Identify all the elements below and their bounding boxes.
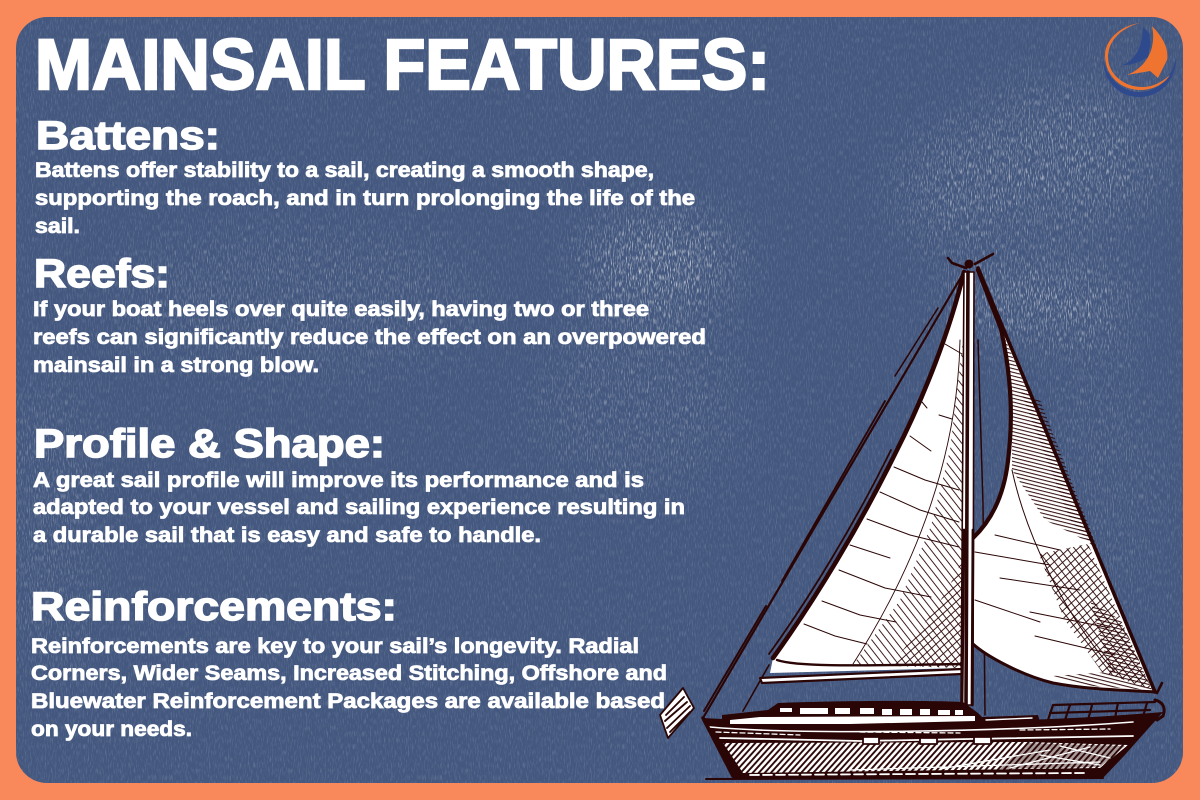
text block: Reefs description: mainsail in a strong blow.: [33, 354, 319, 377]
title: MAINSAIL FEATURES:: [35, 26, 770, 105]
mast: [948, 254, 993, 705]
main sail (left): [760, 272, 966, 683]
section: Reefs: [33, 252, 706, 377]
heading: Profile and Shape: Profile & Shape:: [34, 422, 385, 466]
text block: Reefs description: reefs can significantly reduce the effect on an overpowered: [33, 326, 706, 349]
text block: Profile and Shape description: adapted to your vessel and sailing experience resulting in: [33, 496, 685, 519]
head sail (right): [973, 268, 1155, 692]
stern railing: [1048, 683, 1164, 720]
text block: Reinforcements description: Bluewater Reinforcement Packages are available based: [31, 690, 665, 713]
text block: Reinforcements description: [31, 635, 667, 741]
text block: Profile and Shape description: [33, 469, 685, 547]
text block: Reinforcements description: on your needs.: [31, 718, 192, 741]
text block: Battens description: sail.: [35, 215, 80, 238]
heading: Reinforcements: Reinforcements:: [31, 585, 397, 629]
text block: Battens description: Battens offer stability to a sail, creating a smooth shape,: [35, 159, 654, 182]
deck and cabin: [722, 701, 1040, 724]
illustration: sailboat: [660, 254, 1164, 779]
text block: Battens description: [35, 159, 695, 238]
text block: Reefs description: If your boat heels over quite easily, having two or three: [33, 298, 649, 321]
boom: [760, 669, 962, 683]
text block: Profile and Shape description: A great sail profile will improve its performance and is: [33, 469, 644, 492]
heading: Battens: Battens:: [36, 114, 220, 158]
section: Battens: [35, 114, 695, 238]
logo: sailboat in circle: [1103, 23, 1176, 97]
text block: Reefs description: [33, 298, 706, 377]
text block: Battens description: supporting the roach, and in turn prolonging the life of the: [35, 187, 695, 210]
text block: Reinforcements description: Corners, Wider Seams, Increased Stitching, Offshore and: [31, 662, 667, 685]
section: Reinforcements: [31, 585, 667, 741]
section: Profile and Shape: [33, 422, 685, 547]
heading: Reefs: Reefs:: [34, 252, 170, 296]
text block: Profile and Shape description: a durable sail that is easy and safe to handle.: [33, 524, 541, 547]
hull: [703, 712, 1163, 779]
text block: Reinforcements description: Reinforcements are key to your sail’s longevity. Radial: [31, 635, 639, 658]
rigging lines: [703, 272, 985, 718]
flag: [660, 688, 694, 738]
